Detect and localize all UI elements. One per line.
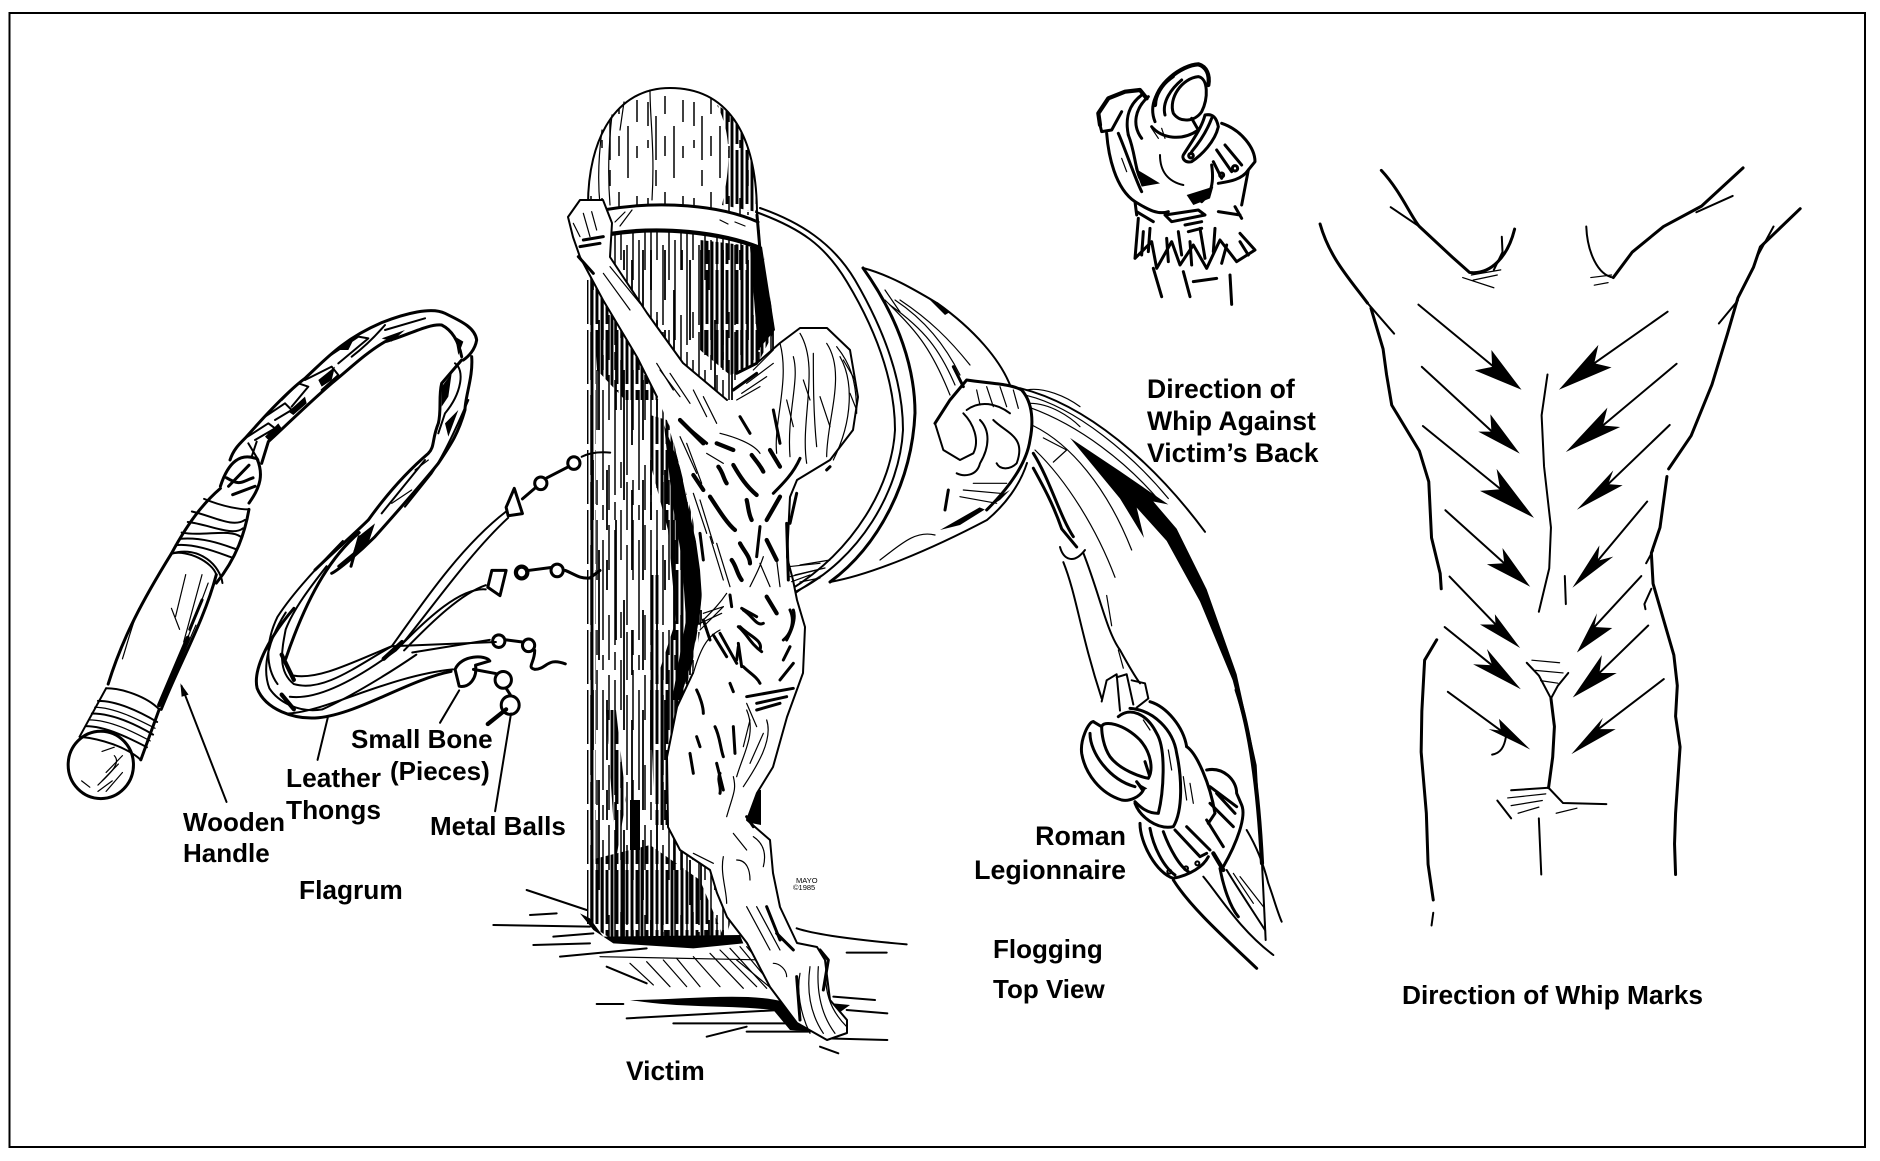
label: Small Bone (Pieces): Small Bone [351, 724, 493, 754]
label: Victim: Victim [626, 1056, 705, 1086]
whip mark arrows left [1418, 305, 1534, 749]
illustration: back with whip marks [1320, 168, 1800, 926]
label: Small Bone (Pieces): (Pieces) [390, 756, 490, 786]
flagrum butt collar and ball [68, 688, 159, 799]
leader line: metal balls [495, 714, 511, 811]
victim skin marks: arm and shoulder [573, 212, 857, 470]
flagrum handle [108, 553, 216, 709]
illustration: whip sweep and band around victim [756, 208, 1027, 596]
victim back marks [680, 410, 820, 667]
band around post [603, 205, 760, 250]
label: Leather Thongs: Leather [286, 763, 381, 793]
whip motion arrow [1020, 388, 1267, 941]
illustration: wooden post [587, 88, 775, 940]
label: artist credit: ©1985 [793, 883, 815, 892]
label: Direction of Whip Against Victim's Back: Direction of [1147, 374, 1295, 404]
label: Direction of Whip Marks: Direction of Whip Marks [1402, 980, 1703, 1010]
label: Direction of Whip Against Victim's Back: Victim’s Back [1147, 438, 1319, 468]
legs [1173, 830, 1282, 968]
top-view arms and torso [1107, 128, 1213, 222]
victim outline [568, 200, 858, 1040]
label: Metal Balls: Metal Balls [430, 811, 566, 841]
label: Flogging Top View: Flogging [993, 934, 1103, 964]
leader line: wooden handle [180, 683, 227, 802]
label: Wooden Handle: Wooden [183, 807, 285, 837]
illustration: victim tied to post [568, 200, 858, 1040]
illustration: flagrum whip [68, 311, 610, 811]
illustration: Roman legionnaire with whip [935, 367, 1282, 968]
legionnaire arm [1033, 468, 1148, 711]
top-view helmet [1152, 64, 1209, 137]
legionnaire helmet, armour and legs [1081, 690, 1282, 968]
armour and skirt [1140, 747, 1243, 878]
illustration: ground and shadows [493, 890, 907, 1053]
top-view shoulders [1098, 90, 1255, 205]
flagrum braid [230, 311, 477, 573]
label: Roman Legionnaire: Roman [1035, 821, 1126, 851]
label: Leather Thongs: Thongs [286, 795, 381, 825]
neck guard [1118, 702, 1193, 827]
legionnaire hand at victim [935, 367, 1080, 537]
label: Roman Legionnaire: Legionnaire [974, 855, 1126, 885]
label: Wooden Handle: Handle [183, 838, 270, 868]
back outline [1320, 168, 1800, 926]
flagrum handle wrap and knot [171, 457, 260, 583]
label: artist credit: MAYO [796, 876, 818, 885]
label: Flagrum: Flagrum [299, 875, 403, 905]
spine and lower back [1492, 374, 1606, 874]
helmet [1081, 722, 1151, 800]
leader line: leather thongs [318, 718, 328, 760]
label: Flogging Top View: Top View [993, 974, 1105, 1004]
illustration: top view of legionnaire [1098, 64, 1255, 304]
victim skin marks: hips and legs [690, 593, 847, 1033]
label: Direction of Whip Against Victim's Back: Whip Against [1147, 406, 1316, 436]
whip mark arrows right [1559, 312, 1677, 754]
flagrum thong tips with metal balls and bone [455, 452, 610, 724]
flagrum leather thongs [256, 512, 508, 718]
top-view belt and skirt [1135, 207, 1255, 304]
leader line: small bone [440, 690, 459, 723]
